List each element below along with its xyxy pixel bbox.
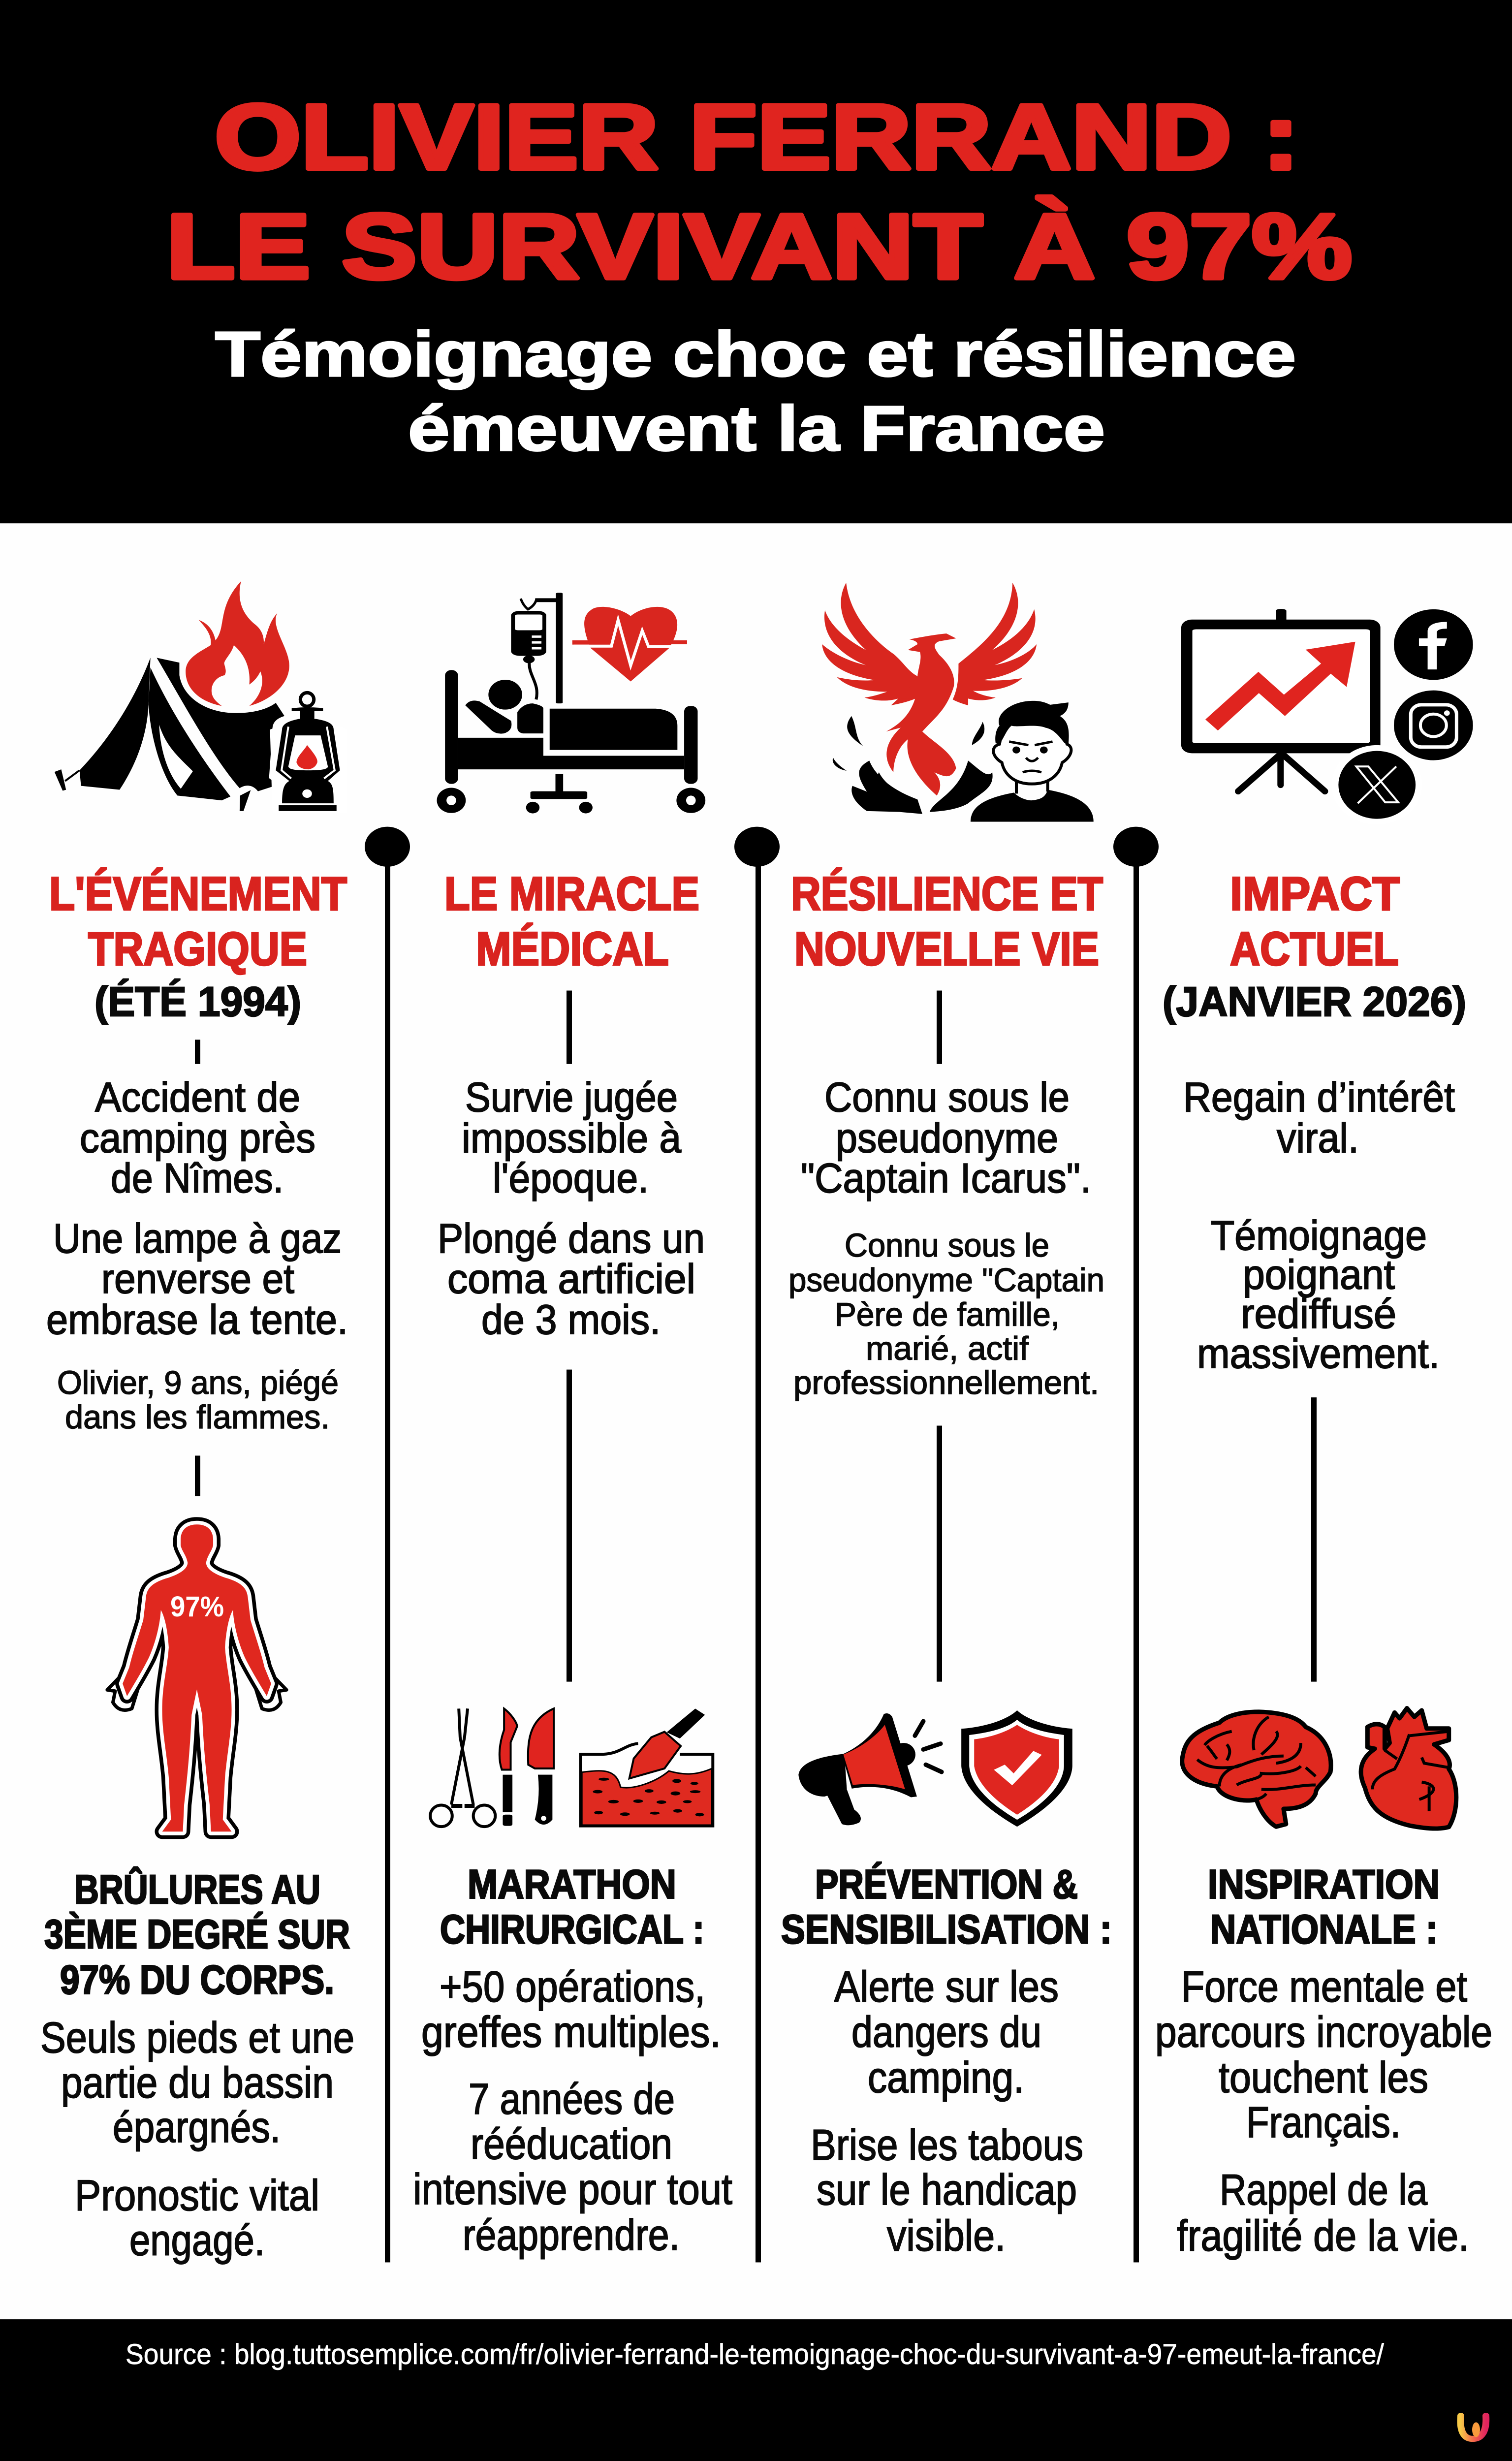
column 1 lower heading: 3ÈME DEGRÉ SUR xyxy=(44,1911,350,1957)
column 4 text xyxy=(1183,1074,1455,1377)
title xyxy=(166,86,1352,298)
column 4 heading: (JANVIER 2026) xyxy=(1163,978,1466,1025)
column 2 lower text: 7 années de xyxy=(469,2075,675,2123)
icon: phoenix xyxy=(822,583,1037,795)
icon: heartbeat heart xyxy=(572,607,687,682)
icon: IV drip xyxy=(511,593,563,703)
icon: tent xyxy=(55,658,284,811)
column 4 lower heading: INSPIRATION xyxy=(1208,1862,1440,1907)
column 2 lower heading: CHIRURGICAL : xyxy=(440,1906,704,1952)
column 4 text: viral. xyxy=(1277,1115,1359,1162)
column 1 lower heading xyxy=(44,1866,350,2002)
column 2 text xyxy=(438,1074,705,1343)
column 3 lower text: Brise les tabous xyxy=(811,2120,1083,2169)
column 2 lower text xyxy=(413,1962,732,2259)
column 4 text: rediffusé xyxy=(1241,1291,1396,1337)
icon: burning tent and lantern xyxy=(55,581,347,813)
column 3 text: Connu sous le xyxy=(824,1074,1070,1121)
icon: lantern xyxy=(270,693,347,813)
icon: flame xyxy=(186,581,289,706)
column 2 lower text: intensive pour tout xyxy=(413,2165,732,2213)
column 4 lower text: touchent les xyxy=(1219,2053,1428,2102)
column 3 text: marié, actif xyxy=(866,1330,1029,1367)
icon: skin graft xyxy=(581,1708,713,1826)
column 1 lower heading: 97% DU CORPS. xyxy=(60,1957,334,2002)
column 3 lower heading: PRÉVENTION & xyxy=(815,1862,1078,1907)
column 3 heading: NOUVELLE VIE xyxy=(794,922,1099,975)
column 3 lower heading xyxy=(781,1862,1112,1952)
column 2 text: l'époque. xyxy=(493,1155,649,1201)
column 1 text: renverse et xyxy=(101,1256,294,1302)
icon: logo xyxy=(1460,2416,1486,2439)
column 4 heading: IMPACT xyxy=(1230,867,1400,920)
column 2 text: coma artificiel xyxy=(447,1256,695,1302)
icon: megaphone xyxy=(798,1713,942,1825)
column 1 lower heading: BRÛLURES AU xyxy=(74,1866,320,1912)
icon: man xyxy=(971,701,1094,822)
connector ticks xyxy=(195,991,1317,1682)
icon: brain xyxy=(1182,1712,1331,1827)
column 2 lower text: rééducation xyxy=(471,2120,672,2168)
column 1 lower text: Seuls pieds et une xyxy=(40,2013,354,2062)
subtitle xyxy=(215,319,1296,464)
column 2 lower text: +50 opérations, xyxy=(440,1962,705,2011)
column 4 lower text: Français. xyxy=(1246,2098,1401,2146)
column 1 text: Accident de xyxy=(95,1074,300,1121)
icon: shield with check xyxy=(961,1710,1072,1827)
column 3 text xyxy=(788,1074,1104,1401)
column 1 text xyxy=(46,1074,348,1436)
icon: X xyxy=(1332,745,1422,824)
column 2 text: de 3 mois. xyxy=(481,1296,661,1343)
column 2 heading xyxy=(444,867,699,975)
column 4 text: Regain d’intérêt xyxy=(1183,1074,1455,1121)
column 2 text: impossible à xyxy=(462,1115,682,1162)
column 2 heading: MÉDICAL xyxy=(476,922,669,975)
icon: phoenix rising with man xyxy=(822,583,1094,822)
column 2 heading: LE MIRACLE xyxy=(444,867,699,920)
column 1 heading: TRAGIQUE xyxy=(88,922,307,975)
column 2 lower text: réapprendre. xyxy=(463,2210,680,2259)
icon: hospital bed with IV and heartbeat xyxy=(437,593,705,814)
column 2 text: Survie jugée xyxy=(465,1074,678,1121)
column 3 lower heading: SENSIBILISATION : xyxy=(781,1906,1112,1952)
column 3 text: pseudonyme "Captain xyxy=(788,1262,1104,1299)
column 1 text: camping près xyxy=(80,1115,315,1162)
column 3 lower text: camping. xyxy=(868,2053,1024,2102)
icon: forceps xyxy=(430,1708,495,1827)
column 3 text: Connu sous le xyxy=(845,1227,1049,1264)
column 3 lower text xyxy=(811,1962,1083,2260)
timeline dividers with dots xyxy=(365,827,1159,2262)
column 2 text: Plongé dans un xyxy=(438,1215,705,1262)
column 3 text: Père de famille, xyxy=(835,1296,1060,1333)
column 3 text: professionnellement. xyxy=(793,1364,1099,1401)
column 1 text: de Nîmes. xyxy=(111,1155,284,1201)
icon: bed xyxy=(437,670,705,814)
icon: surgical tools and skin graft xyxy=(430,1708,713,1827)
footer band xyxy=(0,2319,1512,2461)
column 1 heading: L'ÉVÉNEMENT xyxy=(49,867,347,920)
icon: facebook xyxy=(1394,609,1473,680)
column 4 lower heading xyxy=(1208,1862,1440,1952)
column 4 heading xyxy=(1163,867,1466,1025)
icon: burned body 97% xyxy=(107,1524,286,1831)
column 1 heading: (ÉTÉ 1994) xyxy=(94,978,301,1025)
header band xyxy=(0,0,1512,523)
column 1 lower text: partie du bassin xyxy=(61,2058,334,2107)
column 3 lower text: sur le handicap xyxy=(817,2165,1077,2214)
icon: presentation board with rising arrow xyxy=(1181,609,1473,824)
column 2 lower heading: MARATHON xyxy=(468,1862,676,1907)
column 3 heading xyxy=(791,867,1103,975)
column 3 lower text: Alerte sur les xyxy=(834,1962,1059,2011)
column 3 lower text: dangers du xyxy=(851,2008,1041,2056)
icon: scalpels xyxy=(500,1708,554,1826)
column 4 lower text: Rappel de la xyxy=(1220,2165,1427,2214)
column 4 lower text xyxy=(1155,1962,1492,2260)
column 1 text: Olivier, 9 ans, piégé xyxy=(57,1364,339,1401)
column 1 lower text: épargnés. xyxy=(113,2103,281,2151)
column 4 text: Témoignage xyxy=(1211,1212,1427,1259)
icon: rising arrow xyxy=(1205,642,1355,730)
icon: burned body 97%: 97% xyxy=(170,1591,224,1623)
column 3 text: pseudonyme xyxy=(836,1115,1058,1162)
title: OLIVIER FERRAND : xyxy=(215,86,1299,189)
icon: board xyxy=(1181,609,1381,791)
column 4 heading: ACTUEL xyxy=(1230,922,1399,975)
column 3 text: "Captain Icarus". xyxy=(801,1155,1091,1201)
icon: instagram xyxy=(1394,691,1473,760)
column 1 lower text xyxy=(40,2013,354,2264)
column 1 text: embrase la tente. xyxy=(46,1296,348,1343)
icon: patient xyxy=(465,680,543,734)
column 1 text: dans les flammes. xyxy=(65,1399,330,1436)
column 4 lower heading: NATIONALE : xyxy=(1210,1906,1438,1952)
column 1 text: Une lampe à gaz xyxy=(53,1215,342,1262)
column 1 lower text: Pronostic vital xyxy=(75,2171,319,2219)
column 2 lower text: greffes multiples. xyxy=(421,2008,721,2056)
subtitle: émeuvent la France xyxy=(408,393,1105,464)
column 2 lower heading xyxy=(440,1862,704,1952)
title: LE SURVIVANT À 97% xyxy=(166,195,1352,298)
icon: anatomical heart xyxy=(1361,1708,1456,1829)
column 4 text: massivement. xyxy=(1197,1330,1440,1377)
column 3 heading: RÉSILIENCE ET xyxy=(791,867,1103,920)
subtitle: Témoignage choc et résilience xyxy=(215,319,1296,390)
column 1 lower text: engagé. xyxy=(129,2216,265,2264)
column 3 lower text: visible. xyxy=(887,2211,1006,2260)
column 1 heading xyxy=(49,867,347,1025)
column 4 text: poignant xyxy=(1243,1252,1395,1298)
icon: black flames xyxy=(833,716,993,814)
